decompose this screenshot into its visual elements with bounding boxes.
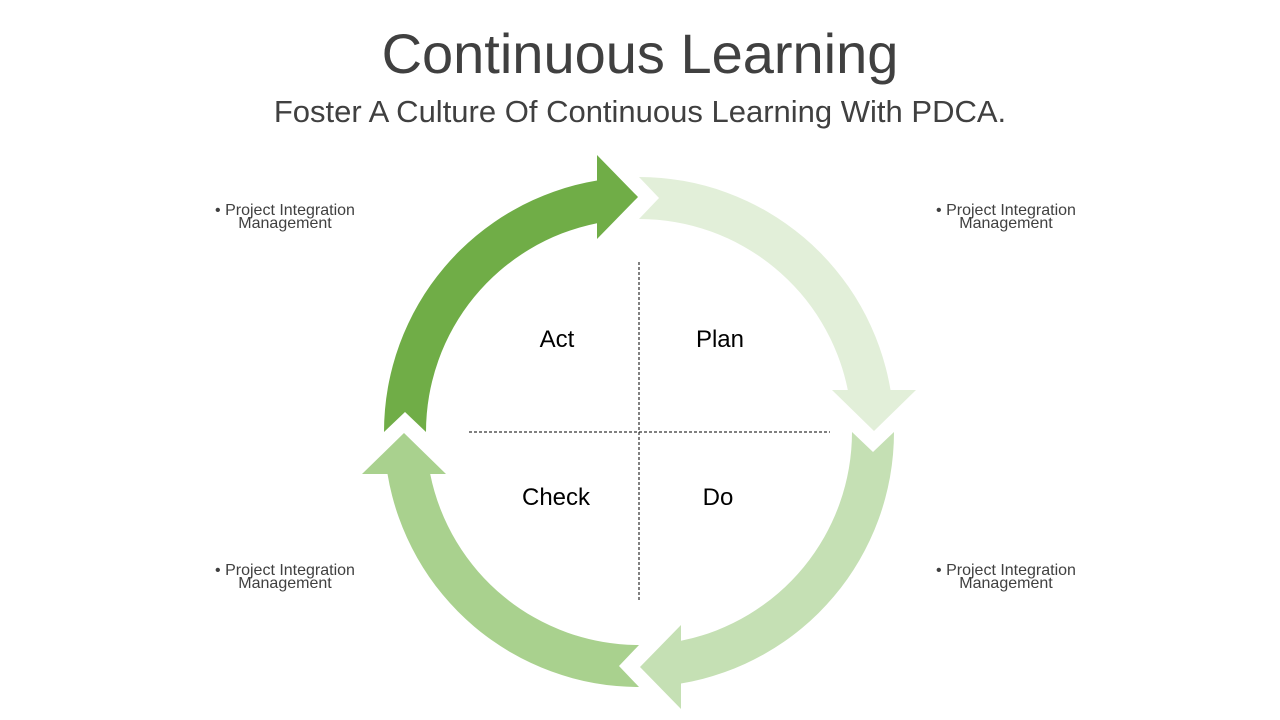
label: check: Check xyxy=(522,484,591,511)
note: top-right: • Project Integration xyxy=(936,202,1076,219)
note: top-left: • Project Integration xyxy=(215,202,355,219)
arrow: do xyxy=(640,432,894,709)
arrow: act xyxy=(384,155,638,432)
label: do: Do xyxy=(703,484,733,511)
note: bottom-right xyxy=(936,562,1076,592)
note: bottom-right: Management xyxy=(959,575,1053,592)
note: bottom-left xyxy=(215,562,355,592)
note: top-left xyxy=(215,202,355,232)
note: bottom-right: • Project Integration xyxy=(936,562,1076,579)
note: top-right xyxy=(936,202,1076,232)
note: top-right: Management xyxy=(959,215,1053,232)
note: top-left: Management xyxy=(238,215,332,232)
label: plan: Plan xyxy=(696,326,744,353)
subtitle: Foster A Culture Of Continuous Learning With PDCA. xyxy=(274,94,1006,129)
label: act: Act xyxy=(540,326,575,353)
arrow: plan xyxy=(639,177,916,431)
title: Continuous Learning xyxy=(382,22,898,85)
note: bottom-left: • Project Integration xyxy=(215,562,355,579)
note: bottom-left: Management xyxy=(238,575,332,592)
arrow: check xyxy=(362,433,639,687)
